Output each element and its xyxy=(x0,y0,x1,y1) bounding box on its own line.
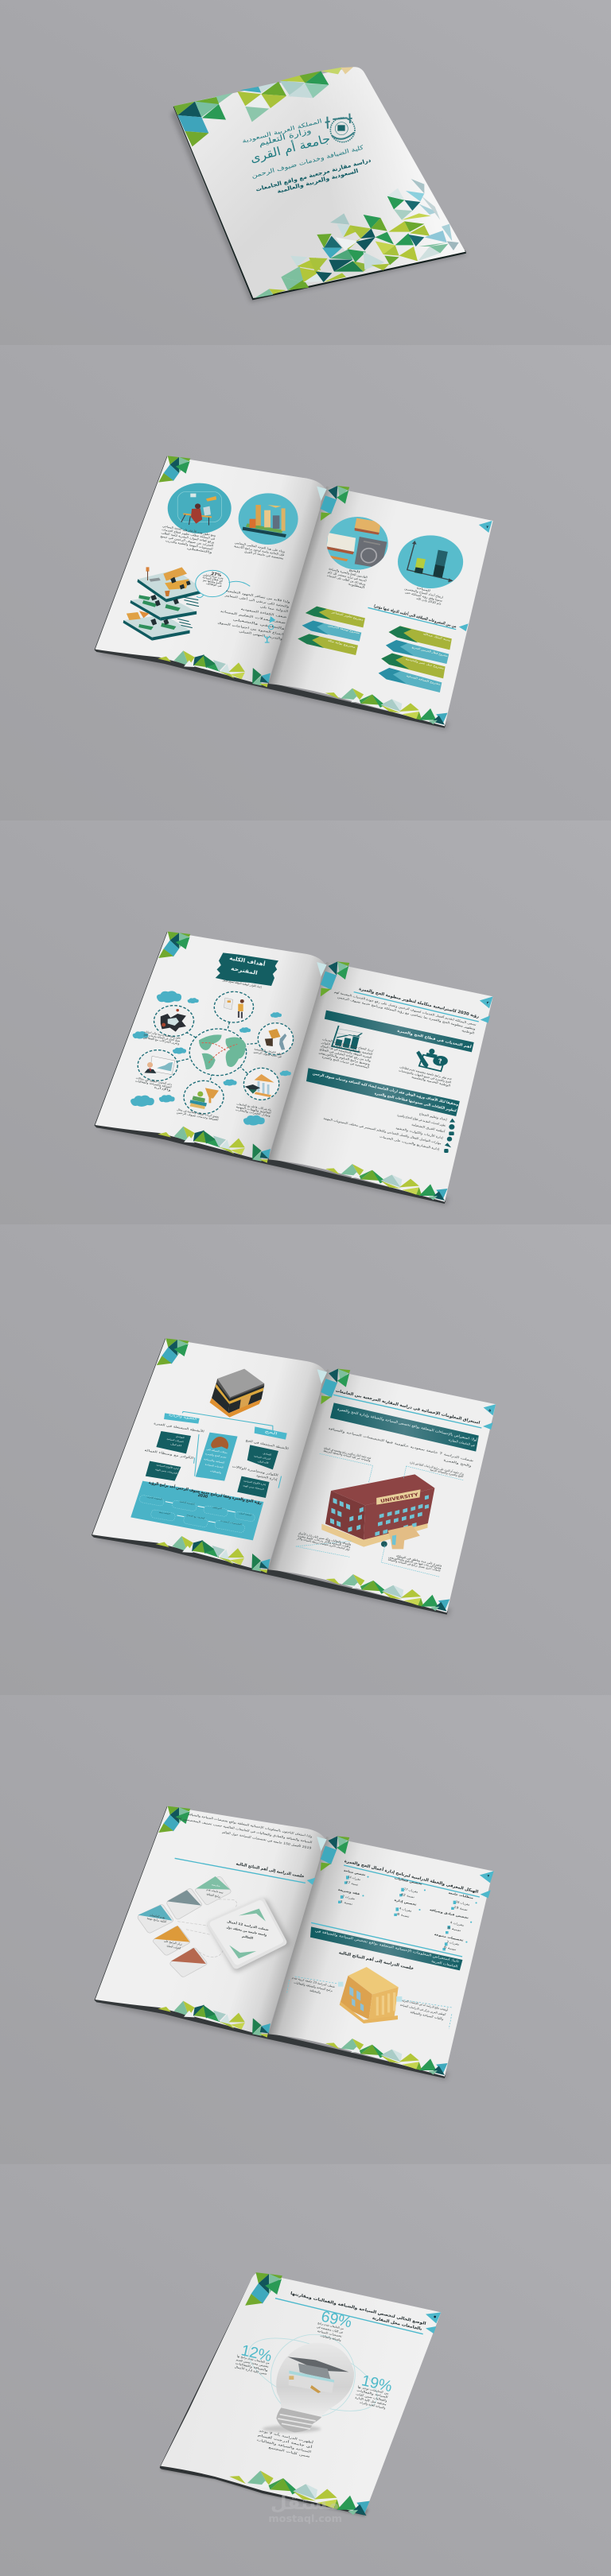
card: teal xyxy=(138,1905,173,1933)
arrow bars left column: مشروع توسعة الحرمين xyxy=(328,624,360,634)
band: analysis: أولا: استعراض بالإحصاءات المتعلقة بواقع تخصص السياحة والضيافة وإدارة الحج والعمرة xyxy=(337,1406,477,1443)
stat: 19 percent: 19% xyxy=(360,2372,394,2396)
paragraph under title xyxy=(333,990,477,1035)
tag: vision and mission: العضوية والزيارة xyxy=(169,1412,197,1422)
left page title and rule: خلصت الدراسة إلى أهم النتائج التالية xyxy=(235,1861,305,1880)
circle: city skyline xyxy=(239,493,298,545)
title and rule: الوضع الحالي لتخصص السياحة والضيافة والفعاليات ومقارنتها xyxy=(290,2291,426,2326)
dark boxes: إدارة الأفواج السياحية xyxy=(156,1463,179,1471)
list group: column two: نسبة 8 xyxy=(396,1912,410,1918)
dark boxes: المسجلة ضمن الهيئة xyxy=(243,1484,264,1491)
clouds xyxy=(130,991,291,1126)
large teal process panel: الجامعة مع الحجاج xyxy=(186,1514,205,1520)
cover study title: دراسة مقارنة مرجعية مع واقع الجامعات xyxy=(255,157,372,193)
dark boxes: الفنادق xyxy=(263,1452,272,1457)
text under circle 1: المستويات المهنية والعلمية والتدريب xyxy=(165,538,213,551)
list group: column one: نسبة 1 xyxy=(340,1899,353,1906)
left page title and rule xyxy=(175,1858,315,1885)
bottom mosaic xyxy=(229,2471,370,2516)
temple note left: شملت الدراسة 23 جامعة عربية تقدم xyxy=(292,1976,336,1988)
panel: spread 3 xyxy=(91,1338,496,1616)
annotation texts xyxy=(296,1445,465,1573)
text under circle 2 xyxy=(233,541,286,560)
circle captions: تطوير برامج تعليمية وتدريبية تواكب احتياجات xyxy=(144,1030,181,1040)
stat: 69 percent xyxy=(315,2308,353,2342)
cover study title: السعودية والعربية والعالمية xyxy=(277,168,359,195)
arrow bars right column: مدينة الملك عبدالله xyxy=(422,632,451,642)
card: mint xyxy=(195,1876,231,1905)
statistics lists xyxy=(337,1868,477,1951)
rule and band xyxy=(310,1922,462,1970)
text under circle 3: الدينية في تزايد مستمر كل عام xyxy=(327,570,367,583)
stat: 12 percent: تخصص محدد ضمن قسم xyxy=(235,2358,269,2368)
circle: man and chart xyxy=(138,1050,177,1080)
stat: 69 percent: والضيافة والفعاليات xyxy=(320,2334,341,2342)
large rounded card: واسعة جامعية من مختلف دول xyxy=(226,1925,267,1937)
corner mosaic xyxy=(245,2272,282,2306)
heading banner: college goals xyxy=(216,952,278,986)
university name text: وزارة التعليم xyxy=(258,126,312,149)
annotation texts: وتتوزع على عدة مناطق في المملكة xyxy=(396,1554,442,1567)
conclusion text: السياحة والضيافة والفعاليات xyxy=(256,2438,311,2454)
band: main challenges: أهم التحديات في قطاع الحج والعمرة xyxy=(397,1028,473,1049)
conclusion text: أظهرت الدراسة بأنه لا يوجد xyxy=(259,2428,313,2444)
dark boxes xyxy=(146,1431,278,1498)
list with icons: إدارة الأزمات والكوارث والحشود xyxy=(395,1126,443,1140)
bottom mosaic xyxy=(255,179,459,298)
large teal process panel xyxy=(130,1480,263,1540)
text under circle 1 xyxy=(158,524,216,554)
stat: 19 percent: مختلفة مثل كلية الإدارة xyxy=(355,2396,387,2407)
stat: 19 percent: السياحة والفعاليات xyxy=(356,2388,388,2399)
list group: column three: متطلبات جامعة xyxy=(448,1891,474,1899)
dark boxes: الشريحات ضمن الهيئة xyxy=(155,1468,178,1475)
text right challenge: الحج والعمرة في جميع الجهات والمؤسسات xyxy=(399,1068,452,1084)
circle captions: في خدمة ضيوف الرحمن xyxy=(253,1049,282,1058)
arrow bars right column: مشروع الضيافة الفندقية xyxy=(406,674,442,686)
list group: column one: مقررات 2 xyxy=(342,1894,356,1900)
temple note left: برامج السياحة والضيافة والفعاليات xyxy=(294,1980,333,1992)
hierarchy connector lines xyxy=(182,1411,282,1488)
list group: column three: مقررات 3 xyxy=(446,1940,460,1946)
icon: clipboard question xyxy=(416,1049,448,1071)
stat: 19 percent xyxy=(354,2372,394,2410)
annotation texts: والضيافة والفعاليات وذلك ضمن كليات إدارة الأعمال xyxy=(298,1530,352,1546)
large teal process panel: الخدمية xyxy=(158,1511,171,1515)
orbit lines xyxy=(239,2319,387,2433)
circle: team meeting xyxy=(154,1006,194,1036)
left page intro paragraph: السياحة والضيافة والفنادق والفعاليات في الجامعات العالمية حسب تصنيف المتخصصين لعام xyxy=(175,1815,313,1844)
university building xyxy=(321,1474,434,1549)
text left challenge: ولابد من رفع كفاءة العاملين في القطاع xyxy=(319,1047,372,1062)
stat: 12 percent: من الجامعات تقدم برامج بها xyxy=(236,2354,270,2365)
circle captions: والإدارة xyxy=(154,1085,172,1092)
circle captions: الضيافة والسياحة والفعاليات xyxy=(135,1079,172,1089)
card: orange: الجوانب العملية xyxy=(166,1943,181,1950)
text under circle 3: الحج xyxy=(348,568,360,574)
temple note left xyxy=(287,1976,343,1994)
cover drop shadow xyxy=(171,109,467,302)
paragraph under title: الوطنية xyxy=(461,1028,475,1035)
conclusion text: أي جامعة أدرجت أقسام xyxy=(257,2433,313,2450)
list group: column two: مقررات 4 xyxy=(399,1907,412,1913)
rule and band: ثانيا: استعراض المعلومات الإحصائية المتعلقة بواقع تخصص السياحة والضيافة في xyxy=(314,1929,460,1964)
list group: column two: تخصص فعاليات xyxy=(394,1876,423,1886)
temple note right: وكليات السياحة والضيافة xyxy=(410,2010,444,2021)
text: challenges list xyxy=(216,588,290,641)
list with icons: إدارة المشاريع والتدريب على الخدمات xyxy=(379,1135,440,1152)
large rounded card xyxy=(211,1902,286,1968)
list group: column two: نسبة 32 xyxy=(400,1892,415,1899)
text under circle 2: فإن الحاجة ماسة لوجود برامج أكاديمية xyxy=(233,544,285,557)
band: analysis: في الجامعات المقارنة xyxy=(448,1437,475,1447)
list group: column one: نسبة 27 xyxy=(345,1880,359,1887)
annotation texts: الحج والعمرة والسياحة الدينية xyxy=(430,1467,464,1478)
small result cards xyxy=(138,1876,231,1977)
circle captions: وتبادل الخبرات والتجارب xyxy=(235,1108,271,1118)
watermark xyxy=(268,2492,342,2524)
text headings: الأنشطة المشتغلة في الحج xyxy=(245,1438,289,1450)
teal column with pilgrim icon: والفعاليات xyxy=(210,1469,222,1474)
page number: ٣ xyxy=(487,1001,489,1005)
arrow bars right column: مشروع جبل عمر والخندمة xyxy=(405,658,445,670)
card: teal: الكلية برامج مهنية xyxy=(146,1916,167,1923)
teal column with pilgrim icon: الخدمات المساندة xyxy=(204,1463,224,1469)
title triangles xyxy=(426,2312,441,2334)
spread 4 pages and mosaics xyxy=(95,1806,494,2081)
text: challenges list: الدولية مما يلي xyxy=(260,604,289,613)
list group: column one xyxy=(337,1868,369,1906)
annotation texts: توفر الجامعات الأخرى تخصصات مرتبطة بالسياحة والآثار xyxy=(296,1536,350,1551)
list group: column three: مقررات 4 xyxy=(449,1920,465,1927)
stat: 69 percent: من الجامعات تقدم برامج xyxy=(317,2322,344,2331)
text under circle 1: ورفع كفاءة الموارد البشرية لتلبية الطلب xyxy=(161,530,215,544)
left page intro paragraph xyxy=(175,1812,313,1850)
annotation texts: تركز جامعة أم القرى على برامج الدراسات العليا في إدارة xyxy=(410,1461,465,1476)
large teal process panel: 2030 xyxy=(197,1493,208,1499)
list with icons: تطوير الخدمات المقدمة في قطاع الحجاج والعمرة xyxy=(397,1113,446,1127)
text: challenges list: اتساع الفجوة بين احتياجات السوق xyxy=(217,620,284,636)
university name text xyxy=(241,118,364,180)
kaaba xyxy=(210,1369,264,1418)
rule and band: الجامعات العربية xyxy=(431,1959,458,1969)
card: teal: تقدم الجامعات xyxy=(150,1913,165,1919)
annotation texts: وتتنوع الدرجات فيها بين الدبلوم والبكالوريوس xyxy=(388,1554,442,1569)
icon: growth chart xyxy=(332,1026,362,1052)
callout: 27 percent bubble: 27% xyxy=(211,572,222,578)
icon: clipboard question: ? xyxy=(438,1057,442,1065)
list with icons: أنظمة الفرق التشغيلية xyxy=(411,1123,446,1133)
university building: UNIVERSITY xyxy=(380,1492,419,1504)
stat: 12 percent xyxy=(234,2342,273,2376)
circle captions: الضيافة وخدمات ضيوف الرحمن xyxy=(176,1110,219,1122)
cover page xyxy=(173,67,465,298)
text right challenge: الوطنية الخدمية والتعليمية xyxy=(411,1075,451,1088)
large rounded card: شملت الدراسة 12 أعمال xyxy=(227,1919,270,1931)
tag: hajj: الحج xyxy=(264,1430,278,1437)
back cover page xyxy=(161,2272,441,2514)
circle captions: سوق العمل في الضيافة وخدمات الحج xyxy=(143,1032,181,1042)
title and rule: استغراق المعلومات الإحصائية في دراسة المقارنة المرجعية بين الجامعات xyxy=(335,1389,481,1426)
page number: ٧ xyxy=(487,1874,490,1878)
heading banner: college goals: أهداف الكلية xyxy=(229,954,266,968)
text under circle 2: متخصصة في جامعة أم القرى xyxy=(244,549,284,560)
temple note right xyxy=(396,1996,452,2029)
title and rule: بالجامعات محل المقارنة xyxy=(372,2316,422,2332)
list group: column three: مقررات 16 xyxy=(455,1899,470,1907)
text under circle 1: ومع تطور هذه الأرقام فإن الحجة السياحي xyxy=(162,524,216,538)
stat: 12 percent: والضيافة والفعاليات xyxy=(235,2361,268,2372)
dark boxes: الدليل xyxy=(170,1442,182,1447)
callout: 27 percent bubble: في قطاع السياحة xyxy=(202,575,224,583)
circle captions: دعم البحوث العلمية في مجالات xyxy=(135,1076,173,1086)
university crest xyxy=(325,114,355,142)
temple note right: الوطني العربي يتركز في الدراسات السياحة xyxy=(399,2003,446,2016)
arrow bars left column: مشروع بوابة مكة xyxy=(328,639,356,649)
panel: spread 1 xyxy=(95,456,493,730)
tag: vision and mission xyxy=(164,1412,200,1424)
text right challenge: عدم توفر برامج جامعية متخصصة تخدم قطاعات xyxy=(399,1065,453,1080)
center world map circle xyxy=(189,1029,247,1076)
list group: column three: تخصص فنادق وضيافة xyxy=(430,1907,469,1919)
list with icons: إعداد وتعليم الحجاج xyxy=(418,1111,447,1122)
text left challenge: ازدياد الحجاج بمعدلات تفوق قدرات الخدمات xyxy=(322,1037,374,1053)
left page intro paragraph: 2019 لأفضل 150 جامعة في تخصصات السياحة حول العالم xyxy=(222,1830,313,1850)
large teal process panel: السعودية للتدريب xyxy=(146,1495,162,1501)
circle captions: وتعزيز الشراكات مع القطاعين xyxy=(143,1035,180,1046)
results heading: خلصت الدراسة إلى أهم النتائج التالية xyxy=(338,1949,414,1971)
circle: tools and hat xyxy=(258,1023,294,1055)
large teal process panel: الضيافة المثلى xyxy=(239,1511,252,1517)
university name text: كلية الضيافة وخدمات ضيوف الرحمن xyxy=(251,143,364,180)
stat: 69 percent: في كليات متخصصة في xyxy=(317,2326,343,2334)
text under circle 3: المطلوبة xyxy=(348,582,365,589)
card: orange: تركز البرامج على xyxy=(164,1938,182,1946)
back cover shadow xyxy=(161,2459,368,2516)
list with icons xyxy=(323,1111,455,1153)
stat: 19 percent: والسياحة العامة والتراث xyxy=(359,2401,386,2410)
title and rule: رؤية 2030 كاستراتيجية متكاملة لتطوير منظومة الحج والعمرة xyxy=(359,987,480,1019)
circle: books and trophy xyxy=(184,1080,224,1114)
card: slate xyxy=(167,1889,201,1919)
annotation texts: تقدم جامعة الملك عبدالعزيز برامج متخصصة في الضيافة xyxy=(324,1445,372,1460)
study sample text: شملت الدراسة 7 جامعة سعودية حكومية فيها التخصصات السياحة والضيافة xyxy=(328,1426,474,1462)
list with icons: مهارات التواصل الفعال والعمل الجماعي والتعلم المستمر في مختلف المستويات المهنية xyxy=(323,1116,442,1145)
tag: hajj xyxy=(255,1426,287,1440)
watermark: مستقل xyxy=(270,2492,340,2514)
list group: column three: نسبة 6 xyxy=(443,1945,457,1951)
list group: column three: نسبة 19 xyxy=(453,1905,468,1911)
list group: column one: مقررات 14 xyxy=(348,1875,361,1881)
list group: column two: تخصص إدارة xyxy=(394,1898,418,1907)
text under circle 3: القادمون للحج والعمرة والسياحة xyxy=(329,567,368,579)
cover dark edge xyxy=(173,107,466,300)
card: orange xyxy=(154,1926,190,1955)
circle: presenter xyxy=(214,991,254,1022)
list group: column two: مقررات 17 xyxy=(403,1887,418,1894)
dark boxes: الشركات السياحية xyxy=(254,1454,271,1461)
text under circle 3 xyxy=(325,563,369,589)
connectors xyxy=(177,1022,257,1080)
annotation texts: جامعات أخرى تشمل برامج في السياحة والضيافة xyxy=(387,1558,442,1573)
spread 2 pages and mosaics xyxy=(95,932,493,1206)
dark boxes: الفنادق xyxy=(176,1435,185,1439)
callout: 27 percent bubble: عالميا ويقابلها نمو xyxy=(202,578,223,585)
text under circle 4: سنويا وفق رؤية المملكة حتى xyxy=(405,590,443,603)
text headings: إدارة الحشود xyxy=(256,1473,278,1482)
list group: column one: تخصص سياحة xyxy=(344,1868,366,1876)
band: college plan: وتحقيقا لتلك الأهداف ورؤية الوطن فقد ارتأت الجامعة إنشاء كلية الضيافة وخدمات ضيوف الرحمن xyxy=(313,1071,459,1108)
text under circle 4: ارتفاع أعداد السياح والمعتمرين xyxy=(404,587,444,599)
text under circle 1: في المملكة تتطلب تطوير قطاع الخدمات xyxy=(162,527,216,541)
text under circle 1: المتزايد من ضيوف الرحمن في جميع xyxy=(160,534,214,547)
banner caption: إعداد الكوادر الوطنية المؤهلة لسوق العمل xyxy=(222,978,262,990)
stat: 19 percent: من الجامعات توجد بها xyxy=(357,2385,389,2396)
list group: column two xyxy=(394,1876,426,1918)
list group: column one: فقه وشريعة xyxy=(337,1887,360,1895)
band: analysis xyxy=(330,1402,479,1452)
paragraph under title: تسعى المملكة لتقديم أفضل الخدمات لضيوف الرحمن وتعمل على رفع جودة الخدمات المقدمة لهم xyxy=(333,990,477,1026)
arrow bars left column: مشروع تطوير المشاعر xyxy=(330,611,364,622)
arrow bars right column xyxy=(379,626,452,692)
page number: ٢ xyxy=(486,525,489,530)
heading banner: college goals: المقترحة xyxy=(231,965,258,976)
text: challenges list: ضعف الكفاءة السعودية xyxy=(240,607,287,619)
callout: 27 percent bubble: وتزيد نسبة العاملين xyxy=(203,572,224,580)
text headings: الكوادر مع وسطاء العمالة xyxy=(144,1448,194,1460)
text under circle 4: السياحة xyxy=(416,586,431,592)
stat: 69 percent: 69% xyxy=(320,2308,353,2331)
band: main challenges xyxy=(325,1011,474,1052)
annotation texts: والسياحة عبر كلية السياحة والأنشطة المرتبطة xyxy=(323,1449,371,1462)
spread 1 pages and mosaics xyxy=(95,456,493,730)
circle captions: العالمية والهيئات المهنية xyxy=(235,1104,271,1115)
dark boxes: الدليل xyxy=(257,1460,270,1465)
top mosaic xyxy=(173,67,353,146)
circle: passport and tickets xyxy=(326,517,388,570)
text under circle 2: وبناء على هذا التوجه العالمي المتنامي xyxy=(235,541,286,553)
card: mint: جامعة xyxy=(211,1883,221,1887)
list group: column three: نسبة 8 xyxy=(447,1926,461,1932)
text under circle 4: عام 2030 بإذن الله xyxy=(416,596,442,607)
list icons xyxy=(264,616,275,642)
text: challenges list: والتدريب المهني العملي xyxy=(239,629,283,641)
stat: 19 percent: والفعاليات ضمن كليات xyxy=(356,2392,387,2403)
paragraph under title: وتطوير منظومة الحج والعمرة بما يتماشى مع رؤية المملكة وبرنامج خدمة ضيوف الرحمن xyxy=(337,995,476,1030)
conclusion text xyxy=(255,2428,313,2458)
stat: 12 percent: 12% xyxy=(239,2342,273,2365)
text: challenges list: ضعف معدلات التعليم المساند xyxy=(220,609,286,624)
circle: bar chart xyxy=(398,535,463,588)
arrow bars left column xyxy=(298,607,365,655)
dark boxes: إدارة الأفواج السياحية xyxy=(243,1479,267,1487)
right page title and rule: الهيكل المعرفي والخطة الدراسية لبرنامج إدارة أعمال الحج والعمرة xyxy=(344,1858,479,1895)
stat: 69 percent: تخصصات السياحة xyxy=(317,2330,342,2338)
left page intro paragraph: ولذا استعان الباحثون بالمعلومات الإحصائية المتعلقة بواقع تخصصات السياحة والضيافة xyxy=(188,1812,313,1839)
teal column with pilgrim icon: تخدم الحج والعمرة xyxy=(205,1452,227,1460)
university name text: المملكة العربية السعودية xyxy=(241,118,323,145)
callout: 27 percent bubble: في الوظائف xyxy=(206,581,222,588)
annotation texts: وكليات السياحة والآثار بدرجات علمية متعددة xyxy=(298,1534,351,1549)
band: college plan: لتطوير الكفاءات التي تستوعبها قطاعات الحج والعمرة xyxy=(374,1091,457,1113)
university name text: جامعة أم القرى xyxy=(248,130,332,165)
text: challenges list: ولذا فلابد من تضافر الجهود التعليمية xyxy=(225,588,290,603)
card: mint: نسبة جامعات تقدم xyxy=(206,1887,224,1895)
text left challenge: البشرية المؤهلة والمتخصصة في هذا المجال xyxy=(320,1044,372,1059)
circle captions: بناء شراكات فاعلة مع الجامعات xyxy=(236,1102,272,1111)
watermark: mostaql.com xyxy=(268,2512,342,2524)
teal column with pilgrim icon: الضيافة والسياحة xyxy=(204,1457,225,1465)
temple note right: أوضحت نتائج الدراسة أنه في الجامعات العربية xyxy=(402,1998,448,2012)
text under circle 4 xyxy=(402,583,445,607)
section title and rule xyxy=(368,603,469,631)
panel: spread 4 xyxy=(95,1806,494,2081)
large teal process panel: رؤية الحج والعمرة وفقا لبرنامج خدمة ضيوف الرحمن أحد برامج الرؤية xyxy=(148,1480,263,1506)
large rounded card: العالم xyxy=(242,1934,254,1940)
isometric office floors xyxy=(123,567,204,641)
panel: spread 2 xyxy=(95,932,493,1206)
circle: designer at desk xyxy=(168,483,232,533)
circle: college building xyxy=(243,1068,279,1100)
panel: brochure cover xyxy=(171,67,467,302)
circle captions xyxy=(134,1030,282,1122)
light bulb with graduation cap xyxy=(263,2343,354,2433)
section title and rule: من بين المشروعات العملاقة التي أعلنت الدولة عنها مؤخرا xyxy=(373,603,457,629)
callout: 27 percent bubble xyxy=(196,570,250,598)
teal column with pilgrim icon xyxy=(196,1433,238,1481)
text left challenge xyxy=(317,1037,374,1069)
dashed connectors xyxy=(177,1899,237,1957)
dark boxes: الشركات السياحية xyxy=(166,1437,184,1443)
temple note left: والمختلفة xyxy=(309,1988,321,1994)
circle captions: تحقيق الريادة الوطنية والعالمية في مجال xyxy=(177,1108,220,1119)
text under circle 3: ويرفع ذلك من الطلب على الخدمات xyxy=(326,573,366,586)
panel: back cover xyxy=(160,2272,441,2524)
text headings xyxy=(144,1421,289,1482)
study sample text: والحج والعمرة xyxy=(443,1457,472,1468)
text left challenge: المتخصصة في خدمات الحج والعمرة xyxy=(321,1054,369,1069)
large teal process panel: التوظيف xyxy=(212,1505,222,1510)
text left challenge: وتوسيع برامج الدبلوم والبكالوريوس xyxy=(318,1050,371,1066)
arrow bars right column: مشروع قطار الحرمين السريع xyxy=(411,646,448,658)
title and rule xyxy=(275,2291,426,2334)
list group: column three xyxy=(430,1891,477,1951)
golden temple xyxy=(340,1967,399,2023)
card: brick xyxy=(170,1948,207,1977)
back cover dark edge xyxy=(160,2280,365,2515)
text: challenges list: والتطبيقي والتشغيلي xyxy=(232,617,285,630)
conclusion text: ضمن كليات المجتمع xyxy=(268,2446,310,2458)
list group: column three: تخصصات متنوعة xyxy=(434,1932,465,1942)
text headings: الأنشطة المشتغلة في العمرة xyxy=(154,1421,204,1433)
text headings: الكوادر وسماسرة الوكالات xyxy=(232,1464,278,1477)
text left challenge: الجامعية ولا توجد أعداد كافية من الكوادر xyxy=(321,1040,373,1056)
page number: ٥ xyxy=(488,1409,491,1413)
text under circle 1: والتشغيلي xyxy=(187,545,212,554)
teal column with pilgrim icon: مجالات الضيافة التي xyxy=(206,1448,228,1454)
circle captions: توفير الكفاءات المتخصصة xyxy=(254,1047,282,1056)
card: mint: برامج الضيافة xyxy=(206,1891,221,1899)
spread 3 pages and mosaics xyxy=(91,1338,496,1616)
large teal process panel: التخصصات المتعددة xyxy=(220,1519,242,1526)
stat: 12 percent: ضمن كلية إدارة الأعمال xyxy=(234,2365,267,2376)
text: challenges list: والبحثية لكي ترتقي الى أعلى المعايير xyxy=(224,593,290,608)
large teal process panel: المؤسسة الجامعية xyxy=(179,1499,195,1506)
annotation lines xyxy=(295,1453,463,1577)
